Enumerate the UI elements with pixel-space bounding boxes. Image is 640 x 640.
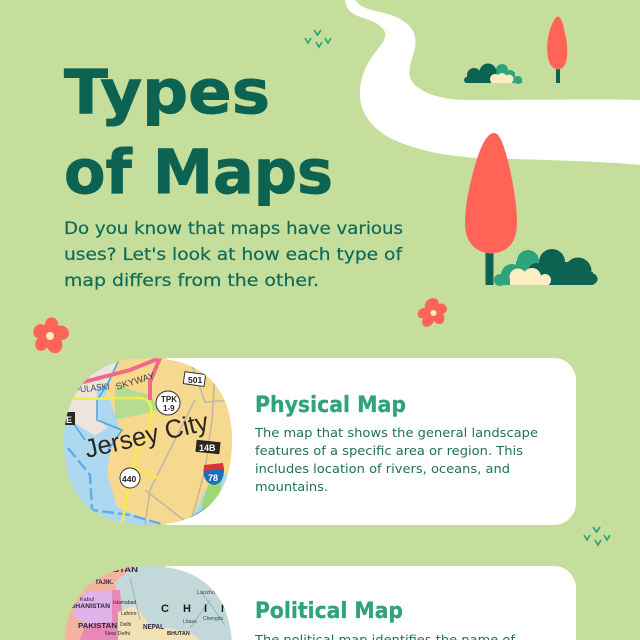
icon: flower left xyxy=(33,317,69,353)
title xyxy=(64,57,333,208)
map photo: Asia: Islamabad xyxy=(113,600,136,606)
map photo: Asia: PAKISTAN xyxy=(78,621,117,630)
map label: Jersey City: Jersey City xyxy=(82,406,211,464)
title: Types xyxy=(64,57,270,128)
map photo: Asia: NEPAL xyxy=(143,624,165,631)
map photo: Asia: C xyxy=(161,603,169,615)
heading: physical map: Physical Map xyxy=(255,393,406,418)
map photo: Jersey City xyxy=(64,358,232,525)
icon: flower right xyxy=(418,298,447,327)
map photo: Asia: BHUTAN xyxy=(167,631,190,637)
map photo: Asia: New Delhi xyxy=(105,631,130,637)
map photo: Asia: GHANISTAN xyxy=(70,603,110,610)
map photo: Jersey City: E xyxy=(66,415,72,425)
description: physical map xyxy=(254,425,538,494)
map photo: Asia: TAJIK. xyxy=(95,580,114,586)
map photo: Jersey City: TPK xyxy=(161,395,177,404)
map photo: Asia: Lahore xyxy=(121,611,137,617)
map photo: Asia: Delhi xyxy=(120,622,131,628)
map photo: Asia: Lhasa xyxy=(183,619,197,625)
intro text: Do you know that maps have various xyxy=(64,219,403,239)
panel: physical map card xyxy=(64,358,576,525)
map photo: Asia: Kabul xyxy=(80,597,94,603)
heading: political map: Political Map xyxy=(255,599,403,624)
map photo: Jersey City: 1-9 xyxy=(163,404,175,413)
map photo: Asia: H xyxy=(183,603,191,615)
icon: large tree xyxy=(465,133,517,285)
map photo: Jersey City: 440 xyxy=(122,474,136,484)
icon: grass right xyxy=(584,527,610,545)
description: physical map: includes location of rivers, oceans, and xyxy=(255,461,510,476)
map photo: Asia: Lanzhou xyxy=(197,590,218,596)
description: physical map: mountains. xyxy=(255,479,328,494)
title: of Maps xyxy=(64,137,333,208)
icon: small bush xyxy=(464,64,522,86)
map photo: Asia: ZSTAN xyxy=(107,567,138,574)
map photo: Jersey City: SKYWAY xyxy=(115,370,157,393)
description: physical map: The map that shows the general landscape xyxy=(254,425,538,440)
map photo: Jersey City: 78 xyxy=(208,473,218,483)
icon: grass top xyxy=(305,30,331,47)
map photo: Jersey City: PULASKI xyxy=(74,381,110,396)
map photo: Jersey City: 501 xyxy=(188,375,202,385)
map photo: Jersey City: 14B xyxy=(199,443,216,453)
intro text: uses? Let's look at how each type of xyxy=(64,245,403,265)
intro text xyxy=(64,219,403,291)
panel: political map card xyxy=(64,566,576,640)
icon: large bush xyxy=(494,249,598,289)
map photo: Asia: I xyxy=(204,603,207,615)
river xyxy=(345,0,640,165)
map photo: Asia: Chengdu xyxy=(203,616,224,622)
intro text: map differs from the other. xyxy=(64,271,319,291)
map photo: Asia xyxy=(64,566,232,640)
map photo: Asia: N xyxy=(221,603,229,615)
description: physical map: features of a specific area or region. This xyxy=(255,443,523,458)
icon: small tree xyxy=(547,16,567,83)
